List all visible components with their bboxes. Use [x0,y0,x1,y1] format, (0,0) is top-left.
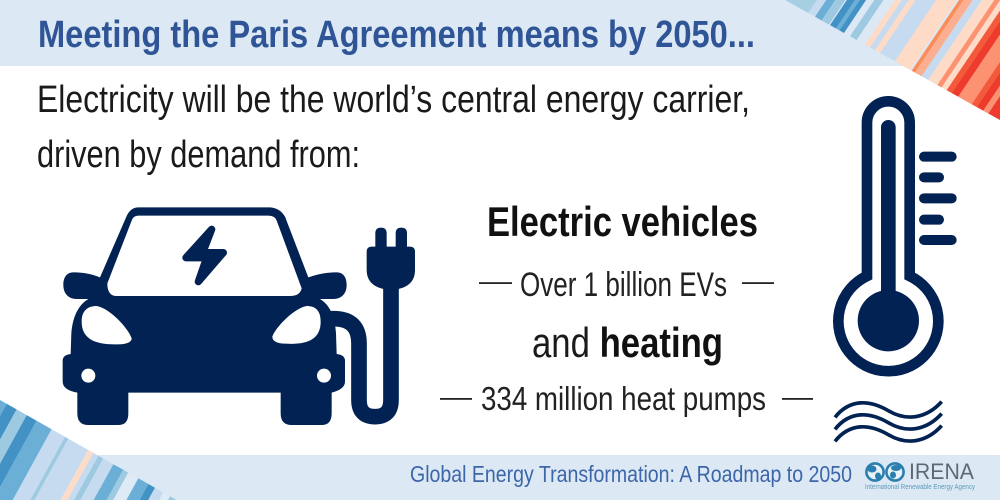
header band [0,0,904,66]
logo globes [866,463,904,481]
stat: EVs: Over 1 billion EVs [520,266,727,304]
footer source text: Global Energy Transformation: A Roadmap to 2050 [410,461,852,487]
footer band [0,455,1000,500]
logo tagline: International Renewable Energy Agency [865,482,975,491]
plug [367,228,415,290]
icon: electric car with plug [63,207,415,425]
intro text [37,79,750,176]
heading: and heating: and heating [532,319,723,366]
intro text: driven by demand from: [37,134,360,176]
logo wordmark: IRENA [909,459,974,484]
stat: heat pumps: 334 million heat pumps [481,380,766,417]
lightning bolt [186,229,223,282]
IRENA logo [865,459,975,491]
warming stripes: bottom left [0,400,177,500]
intro text: Electricity will be the world’s central energy carrier, [37,79,750,121]
warming stripes: top right [785,0,1000,121]
thermometer fill [881,120,896,300]
heading: electric vehicles: Electric vehicles [487,198,758,245]
fog lights [81,369,95,383]
icon: heat waves [835,402,942,441]
cable [328,287,391,417]
car body [63,207,347,425]
scale ticks [919,152,957,162]
thermometer outline [838,101,938,371]
logo continents [868,465,901,480]
icon: thermometer [838,101,957,371]
title: Meeting the Paris Agreement means by 2050... [38,14,755,56]
